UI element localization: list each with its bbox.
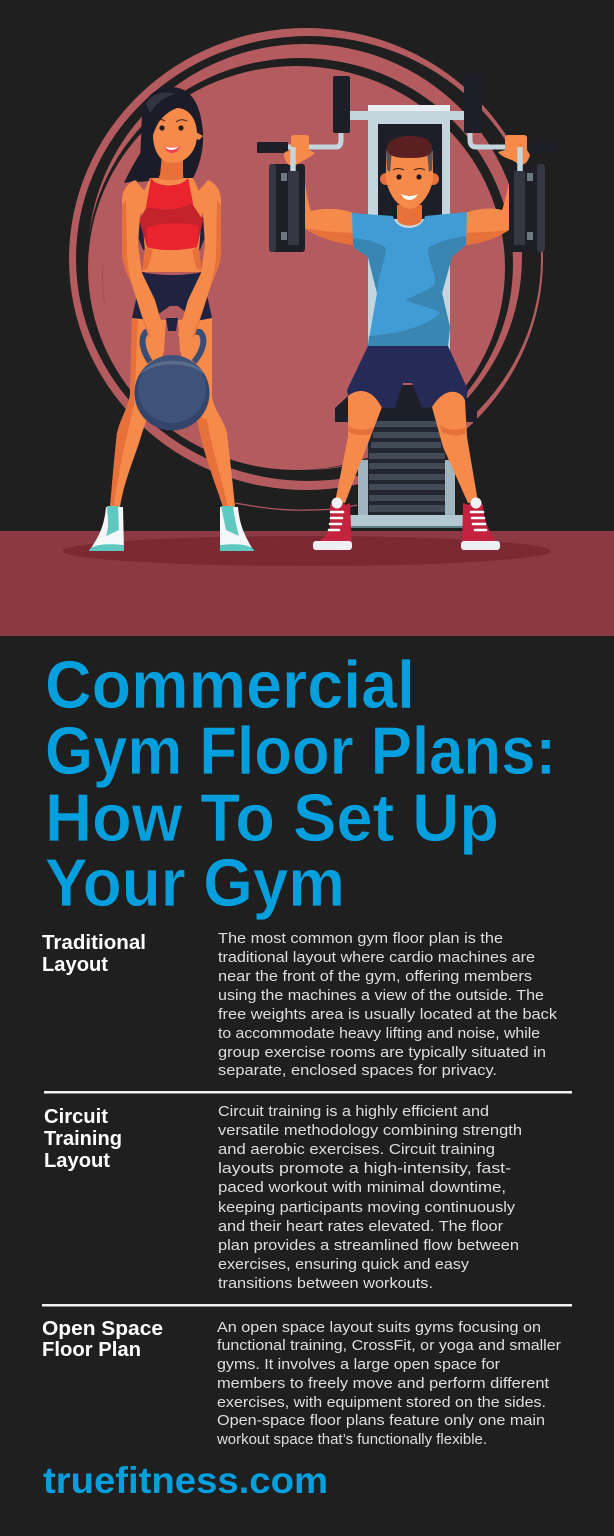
machine base — [350, 515, 463, 528]
body: open space floor plan: functional training, CrossFit, or yoga and smaller — [217, 1337, 561, 1354]
body: open space floor plan — [216, 1319, 561, 1448]
heading: circuit training layout: Layout — [44, 1149, 110, 1172]
body: circuit training layout: paced workout with minimal downtime, — [218, 1179, 506, 1196]
body: traditional layout: traditional layout where cardio machines are — [218, 949, 535, 966]
body: circuit training layout: Circuit training is a highly efficient and — [218, 1103, 489, 1120]
frame — [368, 105, 450, 365]
section: traditional layout — [42, 930, 557, 1079]
title: Your Gym — [45, 845, 345, 921]
body: open space floor plan: gyms. It involves a large open space for — [217, 1356, 500, 1373]
heading: circuit training layout: Circuit — [44, 1105, 108, 1128]
illustration: gym scene — [0, 28, 614, 636]
heading: open space floor plan — [42, 1317, 163, 1361]
hair — [137, 87, 203, 182]
kettlebell — [134, 355, 210, 430]
heading: circuit training layout: Training — [44, 1127, 122, 1150]
neck — [159, 155, 183, 180]
heading: open space floor plan: Open Space — [42, 1317, 163, 1340]
body: circuit training layout: and their heart rates elevated. The floor — [218, 1218, 503, 1235]
legs — [335, 388, 382, 503]
heading: traditional layout: Traditional — [42, 931, 146, 954]
title: How To Set Up — [45, 780, 499, 856]
arms — [122, 180, 165, 343]
face — [153, 108, 197, 163]
body: open space floor plan: members to freely move and perform different — [217, 1375, 550, 1392]
man on machine — [284, 135, 530, 550]
hair — [387, 136, 432, 158]
body: circuit training layout: transitions between workouts. — [218, 1275, 433, 1292]
body: open space floor plan: exercises, with equipment stored on the sides. — [217, 1394, 546, 1411]
section: open space floor plan — [42, 1317, 561, 1448]
shorts — [132, 272, 212, 321]
legs — [110, 318, 166, 507]
body: circuit training layout: keeping participants moving continuously — [218, 1199, 515, 1216]
body: open space floor plan: An open space layout suits gyms focusing on — [217, 1319, 541, 1336]
section: circuit training layout — [44, 1103, 522, 1292]
body: traditional layout: to accommodate heavy lifting and noise, while — [218, 1025, 540, 1042]
neck — [397, 205, 422, 226]
backdrop circle with rings — [69, 28, 543, 510]
body: traditional layout: free weights area is usually located at the back — [218, 1006, 557, 1023]
right weight pad — [509, 164, 545, 252]
seat — [335, 385, 477, 422]
shorts — [347, 346, 468, 408]
left weight pad — [269, 164, 305, 252]
kettlebell handle — [143, 331, 203, 362]
floor shadow — [63, 536, 551, 566]
chest press machine — [257, 74, 557, 528]
heading: traditional layout — [42, 931, 146, 976]
weight stack — [368, 421, 445, 515]
body: circuit training layout: and aerobic exercises. Circuit training — [218, 1141, 495, 1158]
grips — [333, 76, 350, 133]
t-shirt — [352, 212, 467, 346]
woman with kettlebell — [89, 87, 254, 551]
body: open space floor plan: workout space that’s functionally flexible. — [216, 1431, 487, 1448]
body: circuit training layout — [218, 1103, 522, 1292]
title: Commercial — [45, 647, 415, 723]
eyes and smile — [159, 125, 165, 131]
heading: circuit training layout — [44, 1105, 122, 1172]
body: traditional layout: using the machines a view of the outside. The — [218, 987, 544, 1004]
heading: open space floor plan: Floor Plan — [42, 1338, 141, 1361]
body: circuit training layout: versatile methodology combining strength — [218, 1122, 522, 1139]
body: traditional layout: The most common gym floor plan is the — [218, 930, 503, 947]
title: Gym Floor Plans: — [45, 713, 556, 789]
body: traditional layout: near the front of the gym, offering members — [218, 968, 532, 985]
head — [380, 136, 439, 209]
body: traditional layout: group exercise rooms are typically situated in — [218, 1044, 546, 1061]
body: circuit training layout: exercises, ensuring quick and easy — [218, 1256, 469, 1273]
website url: truefitness.com — [43, 1460, 328, 1501]
body: traditional layout — [218, 930, 557, 1079]
shoes — [90, 507, 124, 550]
body: open space floor plan: Open-space floor plans feature only one main — [217, 1412, 545, 1429]
body: traditional layout: separate, enclosed spaces for privacy. — [218, 1062, 497, 1079]
body: circuit training layout: layouts promote a high-intensity, fast- — [218, 1160, 511, 1177]
title — [45, 647, 556, 921]
torso — [140, 178, 203, 272]
left sneaker — [313, 498, 352, 550]
red crop top — [139, 178, 203, 250]
hands — [284, 135, 315, 165]
heading: traditional layout: Layout — [42, 953, 108, 976]
right sneaker — [461, 498, 500, 550]
arms — [305, 183, 353, 245]
dark sides of top — [137, 215, 206, 250]
body: circuit training layout: plan provides a streamlined flow between — [218, 1237, 519, 1254]
floor — [0, 531, 614, 636]
